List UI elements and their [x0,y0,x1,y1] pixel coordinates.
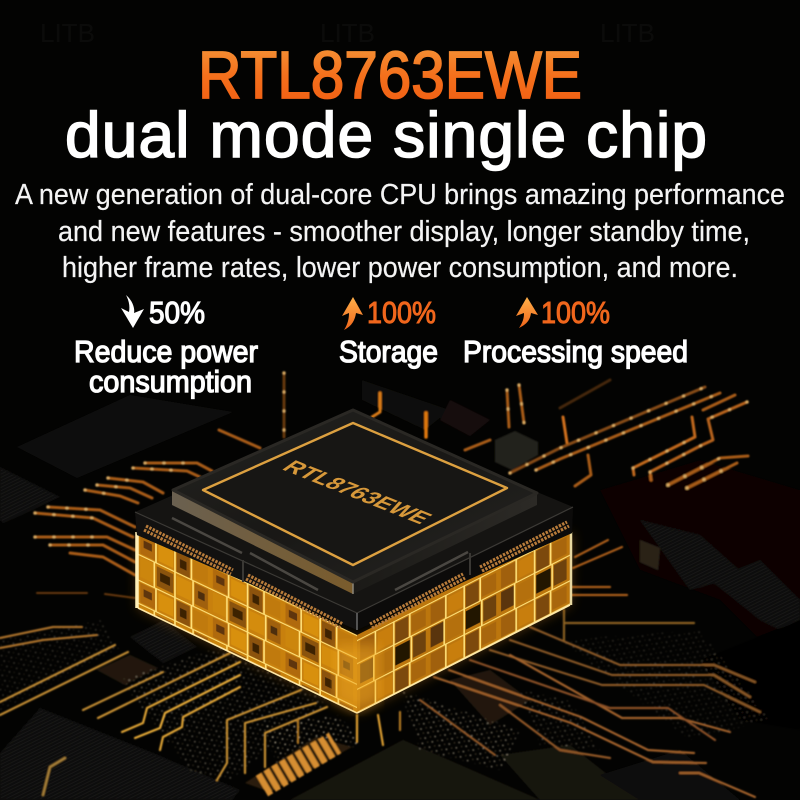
chip label: RTL8763EWE [276,457,437,528]
orange connector comb [245,737,352,792]
gold outline [203,423,507,565]
icon: white down arrow [121,295,144,328]
label: consumption [89,364,252,399]
glowing right face [357,528,572,713]
icon: orange up arrow [516,297,538,328]
glow [137,533,572,713]
value 50%: 50% [149,295,205,330]
solder dot fields [0,620,770,780]
icon: orange up arrow [342,297,363,330]
watermark: LITB [600,18,655,48]
glowing left face [137,530,357,713]
watermark: LITB [40,18,95,48]
label: Storage [339,334,438,369]
description text [15,179,785,284]
dark blocks upper right [362,380,800,680]
description text: and new features - smoother display, longer standby time, [58,216,750,248]
cap side [172,490,537,592]
lower circuit traces [0,610,760,797]
watermark [40,18,655,48]
dark blocks bottom [0,620,800,800]
watermark: LITB [320,18,375,48]
subtitle: dual mode single chip [65,99,707,171]
upper circuit traces [35,373,748,598]
title: RTL8763EWE [198,38,582,113]
dark chip upper left [0,395,233,523]
label: Reduce power [74,334,258,369]
gold contact strips [144,522,569,628]
stat: reduce power consumption [74,295,258,399]
value 100%: 100% [367,295,436,330]
base plate [135,415,573,630]
trace vias [35,373,747,545]
stat: storage [339,295,438,369]
glowing corner [335,645,380,710]
value 100%: 100% [541,295,610,330]
cap top [173,410,537,582]
chip illustration [135,410,573,713]
label [74,334,258,399]
description text: higher frame rates, lower power consumption, and more. [62,252,738,284]
label: Processing speed [463,334,688,369]
stat: processing speed [463,295,688,369]
